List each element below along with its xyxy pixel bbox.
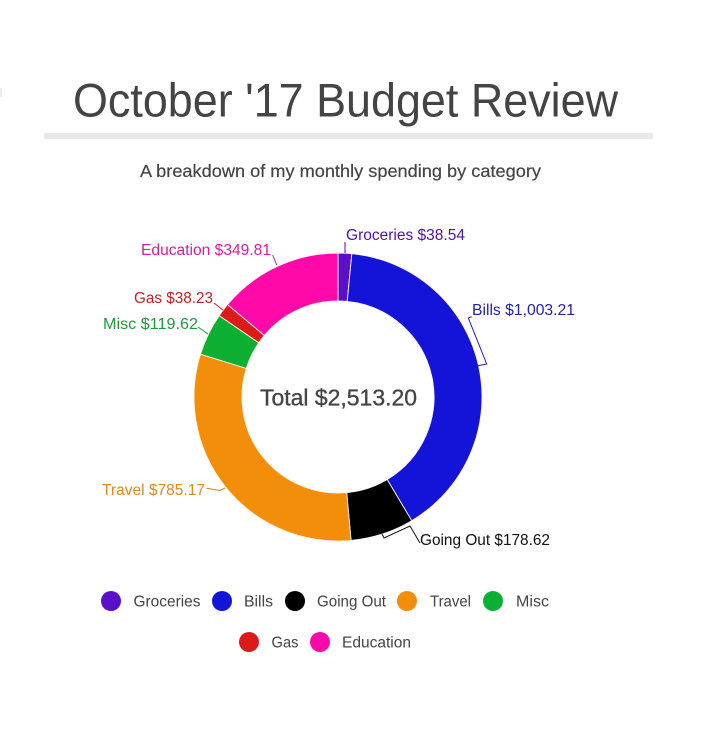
label: bills: Bills $1,003.21: [472, 302, 575, 319]
legend: misc: [483, 591, 549, 611]
label: education: Education $349.81: [141, 242, 271, 259]
legend: education: Education: [342, 634, 411, 652]
legend: gas: Gas: [272, 634, 299, 652]
legend: [101, 591, 549, 652]
legend: bills: Bills: [244, 594, 273, 610]
label: going out: Going Out $178.62: [420, 532, 550, 549]
slice: bills: [347, 254, 482, 521]
label: gas: Gas $38.23: [134, 290, 213, 307]
legend: gas: [239, 632, 299, 652]
legend: going out: [285, 591, 387, 611]
slice: going out: [347, 479, 412, 540]
subtitle: A breakdown of my monthly spending by category: [140, 161, 541, 181]
label: going out: [382, 526, 550, 549]
label: groceries: Groceries $38.54: [346, 227, 465, 244]
slice: education: [228, 253, 338, 335]
legend: bills: [212, 591, 273, 611]
label: travel: Travel $785.17: [102, 482, 205, 499]
legend: going out: Going Out: [317, 594, 387, 610]
title: October '17 Budget Review: [73, 74, 619, 128]
donut total: Total $2,513.20: [260, 384, 417, 410]
slice: groceries: [338, 253, 352, 301]
legend: education: [310, 632, 411, 652]
donut chart: [194, 253, 482, 541]
label: bills: [468, 302, 575, 366]
legend: travel: [397, 591, 471, 611]
slice: travel: [194, 354, 351, 541]
legend: groceries: [101, 591, 201, 611]
label: groceries: [345, 227, 465, 253]
legend: travel: Travel: [430, 594, 471, 610]
legend: groceries: Groceries: [134, 594, 201, 610]
legend: misc: Misc: [516, 594, 549, 610]
label: misc: Misc $119.62: [103, 316, 198, 333]
slice: misc: [200, 316, 259, 368]
slice: gas: [219, 305, 264, 343]
